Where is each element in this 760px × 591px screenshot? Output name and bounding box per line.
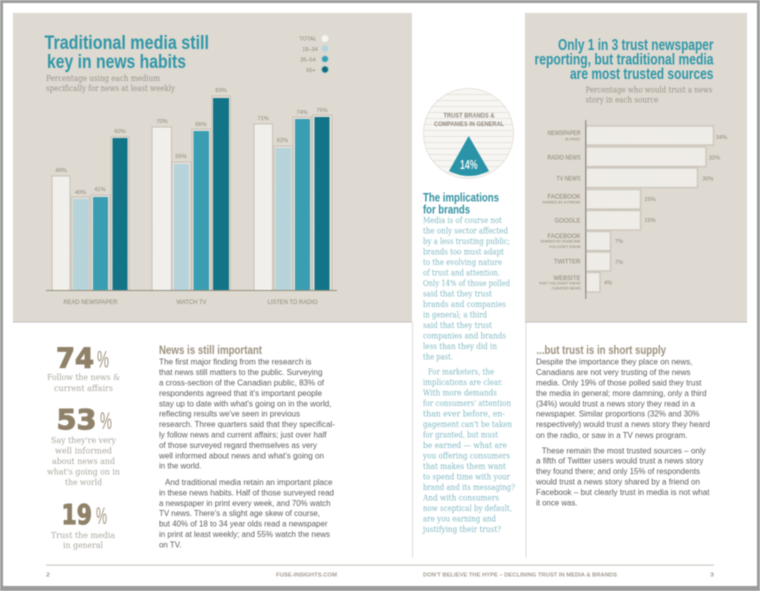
category labels: READ NEWSPAPER: [64, 299, 118, 306]
text block: implications for brands: the only sector affected: [423, 226, 509, 236]
row labels: RADIO NEWS: [548, 156, 580, 162]
chart subtitle: [586, 86, 712, 106]
section body: Canadians are not very trusting of the news: [536, 367, 690, 377]
footer: 2: [46, 572, 50, 578]
text block: implications for brands: you offering consumers: [422, 451, 510, 461]
text block: but trust is in short supply: [535, 343, 710, 508]
bar values: [55, 88, 328, 196]
bar chart: weekly news use: [46, 88, 337, 306]
category labels: [64, 299, 318, 306]
legend: 35–54: [300, 58, 316, 64]
stat caption: Trust the media: [51, 530, 115, 540]
stat caption: the world: [65, 477, 102, 487]
text block: implications for brands: Media is of course not: [423, 215, 503, 225]
text block: implications for brands: in general; a third: [423, 310, 488, 320]
text block: implications for brands: that makes them want: [423, 461, 507, 471]
heading: only 1 in 3: reporting, but traditional media: [534, 52, 714, 68]
text block: implications for brands: brand and its messaging?: [423, 482, 515, 492]
stat caption: about news and: [52, 456, 115, 466]
heading: implications for brands: for brands: [423, 202, 470, 216]
row values: 30%: [702, 176, 714, 182]
stat: 53 percent: [47, 403, 121, 487]
graphic title: COMPANIES IN GENERAL: [434, 121, 504, 128]
section body: stay up to date with what's going on in the world,: [159, 398, 332, 408]
stat: 74 percent: %: [97, 346, 109, 374]
row values: 34%: [716, 135, 727, 141]
column dividers: [412, 322, 526, 558]
section body: would trust a news story shared by a friend on: [535, 476, 700, 486]
text block: implications for brands: brands too must adapt: [423, 246, 505, 256]
footer: [46, 565, 714, 578]
section body: on TV.: [159, 539, 182, 549]
section body: a newspaper in print every week, and 70% watch: [159, 498, 331, 508]
row labels: SHARED BY SOMEONE: [540, 240, 581, 244]
section body: but 40% of 18 to 34 year olds read a newspaper: [159, 519, 328, 529]
row values: 7%: [615, 239, 623, 245]
section body: research. Three quarters said that they specifical-: [159, 419, 335, 429]
row labels: [539, 131, 581, 290]
section heading: News is still important: [159, 343, 262, 357]
row labels: YOU DON'T KNOW: [549, 245, 581, 249]
graphic title: [434, 112, 504, 128]
heading: only 1 in 3: [534, 37, 714, 83]
stat: 19 percent: 19: [62, 498, 92, 531]
bar values: 75%: [316, 108, 328, 114]
stat: 19 percent: [51, 498, 115, 550]
bar values: 55%: [175, 154, 187, 160]
text block: news is still important: [158, 343, 335, 549]
stat caption: in general: [63, 540, 103, 550]
category labels: LISTEN TO RADIO: [268, 299, 318, 306]
row values: 32%: [709, 156, 720, 162]
row labels: TWITTER: [554, 260, 581, 266]
heading: traditional media: key in news habits: [47, 51, 186, 73]
section body: a fifth of Twitter users would trust a news story: [536, 456, 704, 466]
heading: implications for brands: The implications: [423, 190, 499, 204]
legend: 55+: [306, 68, 316, 74]
bar values: 70%: [156, 119, 168, 125]
stat caption: what's going on in: [47, 466, 121, 476]
section body: that news still matters to the public. Surveying: [159, 367, 323, 377]
chart subtitle: [46, 74, 175, 94]
chart subtitle: story in each source: [586, 96, 658, 106]
text block: implications for brands: for granted, but must: [423, 430, 499, 440]
text block: implications for brands: be earned — what are: [423, 440, 507, 450]
stat caption: Follow the news &: [47, 372, 120, 382]
section heading: ...but trust is in short supply: [536, 343, 666, 357]
stat caption: Say they're very: [51, 435, 116, 445]
bar values: 41%: [94, 187, 106, 193]
section body: Facebook – but clearly trust in media is not what: [536, 487, 710, 497]
section body: The first major finding from the research is: [159, 357, 312, 367]
bar values: 40%: [75, 190, 86, 196]
stat: 53 percent: 53: [56, 403, 96, 436]
legend: 18–34: [302, 47, 318, 53]
section body: newspaper. Similar proportions (32% and 30%: [536, 409, 700, 419]
section body: These remain the most trusted sources – only: [542, 445, 706, 455]
section body: on the radio, or saw in a TV news program.: [536, 430, 688, 440]
panel: trust in sources chart: [525, 13, 747, 322]
row labels: THAT YOU DON'T KNOW: [539, 282, 581, 286]
bar values: 66%: [195, 122, 207, 128]
footer: FUSE-INSIGHTS.COM: [276, 572, 337, 578]
text block: implications for brands: Only 14% of those polled: [423, 278, 511, 288]
text block: implications for brands: companies and brands: [423, 330, 506, 340]
stat caption: current affairs: [54, 383, 113, 393]
legend: [299, 35, 328, 74]
text block: implications for brands: For marketers, the: [428, 367, 494, 377]
heading: implications for brands: [423, 190, 499, 216]
row labels: TV NEWS: [556, 176, 580, 182]
panel: traditional media chart: [13, 13, 412, 322]
row labels: GOOGLE: [554, 218, 580, 224]
text block: implications for brands: less than they did in: [423, 341, 498, 351]
legend: TOTAL: [299, 36, 317, 42]
stat caption: [47, 435, 121, 487]
text block: implications for brands: said that they trust: [423, 288, 493, 298]
chart subtitle: Percentage who would trust a news: [586, 86, 712, 96]
row values: 15%: [644, 218, 656, 224]
section body: they found there; and only 15% of respondents: [536, 466, 700, 476]
row values: [604, 135, 727, 286]
text block: implications for brands: [422, 215, 515, 534]
text block: implications for brands: of trust and attention.: [423, 268, 500, 278]
section body: a cross-section of the Canadian public, 83% of: [159, 378, 325, 388]
text block: implications for brands: now sceptical by default,: [423, 503, 512, 513]
chart subtitle: specifically for news at least weekly: [46, 84, 175, 94]
text block: implications for brands: than ever before, en-: [423, 409, 505, 419]
bar values: 60%: [114, 129, 126, 135]
text block: implications for brands: the past.: [423, 352, 453, 362]
footer: DON'T BELIEVE THE HYPE – DECLINING TRUST IN MEDIA & BRANDS: [423, 572, 617, 578]
bar values: 49%: [55, 168, 67, 174]
row labels: IN PRINT: [565, 138, 581, 142]
section body: in these news habits. Half of those surveyed read: [159, 487, 334, 497]
section body: well informed about news and what's going on: [158, 450, 324, 460]
row values: 4%: [604, 280, 612, 286]
text block: implications for brands: said that they trust: [423, 320, 493, 330]
slice label: 14%: [460, 157, 478, 172]
bars: read newspaper: [52, 136, 129, 290]
icon: trust brands pie graphic: [424, 88, 514, 178]
section body: media. Only 19% of those polled said they trust: [536, 378, 702, 388]
row labels: FACEBOOK: [547, 194, 580, 200]
row labels: WEBSITE: [553, 276, 580, 282]
text block: implications for brands: gagement can't be taken: [423, 419, 513, 429]
section body: in print at least weekly; and 55% watch the news: [159, 529, 330, 539]
row labels: CURATED NEWS: [552, 286, 581, 290]
row values: 15%: [644, 197, 656, 203]
section body: it once was.: [536, 498, 578, 508]
horizontal bar chart: trusted sources: [539, 120, 727, 299]
bar values: 62%: [277, 138, 288, 144]
heading: traditional media: [44, 32, 209, 73]
section body: [535, 357, 710, 508]
text block: implications for brands: justifying their trust?: [422, 524, 501, 534]
section body: reflecting results we've seen in previous: [159, 409, 300, 419]
pie slice: [449, 136, 489, 176]
section body: [158, 357, 335, 549]
heading: only 1 in 3: are most trusted sources: [570, 66, 714, 83]
text block: implications for brands: And with consumers: [422, 493, 499, 503]
stat caption: [47, 372, 120, 393]
heading: traditional media: Traditional media still: [44, 32, 209, 54]
bars: listen to radio: [254, 115, 332, 290]
bars: [586, 126, 714, 292]
stat: 74 percent: [47, 342, 120, 393]
text block: implications for brands: With more demands: [423, 388, 497, 398]
text block: implications for brands: implications are clear.: [423, 377, 503, 387]
text block: implications for brands: brands and companies: [423, 299, 506, 309]
chart subtitle: Percentage using each medium: [46, 74, 160, 84]
stat caption: well informed: [55, 446, 112, 456]
text block: implications for brands: by a less trusting public;: [423, 236, 510, 246]
section body: (34%) would trust a news story they read in a: [536, 398, 695, 408]
section body: Despite the importance they place on news,: [536, 357, 692, 367]
stat: 74 percent: 74: [56, 342, 94, 374]
category labels: WATCH TV: [176, 299, 207, 306]
bars: watch tv: [152, 96, 230, 290]
section body: in the world.: [159, 461, 202, 471]
row labels: SHARED BY A FRIEND: [542, 200, 581, 204]
row labels: NEWSPAPER: [548, 131, 581, 137]
section body: And traditional media retain an important place: [165, 477, 333, 487]
bar values: 83%: [215, 88, 227, 94]
graphic title: TRUST BRANDS &: [444, 112, 495, 120]
row values: 7%: [615, 260, 623, 266]
stat: 19 percent: %: [96, 503, 107, 530]
section body: ly follow news and current affairs; just over half: [159, 430, 327, 440]
text block: implications for brands: are you earning and: [423, 514, 497, 524]
section body: the media in general; more damning, only a third: [536, 388, 707, 398]
section body: TV news. There's a slight age skew of course,: [159, 508, 320, 518]
section body: respectively) would trust a news story they heard: [536, 419, 710, 429]
text block: implications for brands: to spend time with your: [423, 472, 510, 482]
section body: of those surveyed regard themselves as very: [159, 440, 318, 450]
stat: 53 percent: %: [100, 408, 112, 435]
heading: only 1 in 3: Only 1 in 3 trust newspaper: [558, 37, 714, 54]
row labels: FACEBOOK: [547, 234, 580, 240]
text block: implications for brands: to the evolving nature: [423, 257, 502, 267]
footer: 3: [710, 572, 714, 578]
bar values: 71%: [257, 116, 269, 122]
bar values: 74%: [296, 110, 308, 116]
stat caption: [51, 530, 115, 550]
section body: respondents agreed that it's important people: [159, 388, 322, 398]
text block: implications for brands: for consumers' attention: [423, 398, 511, 408]
